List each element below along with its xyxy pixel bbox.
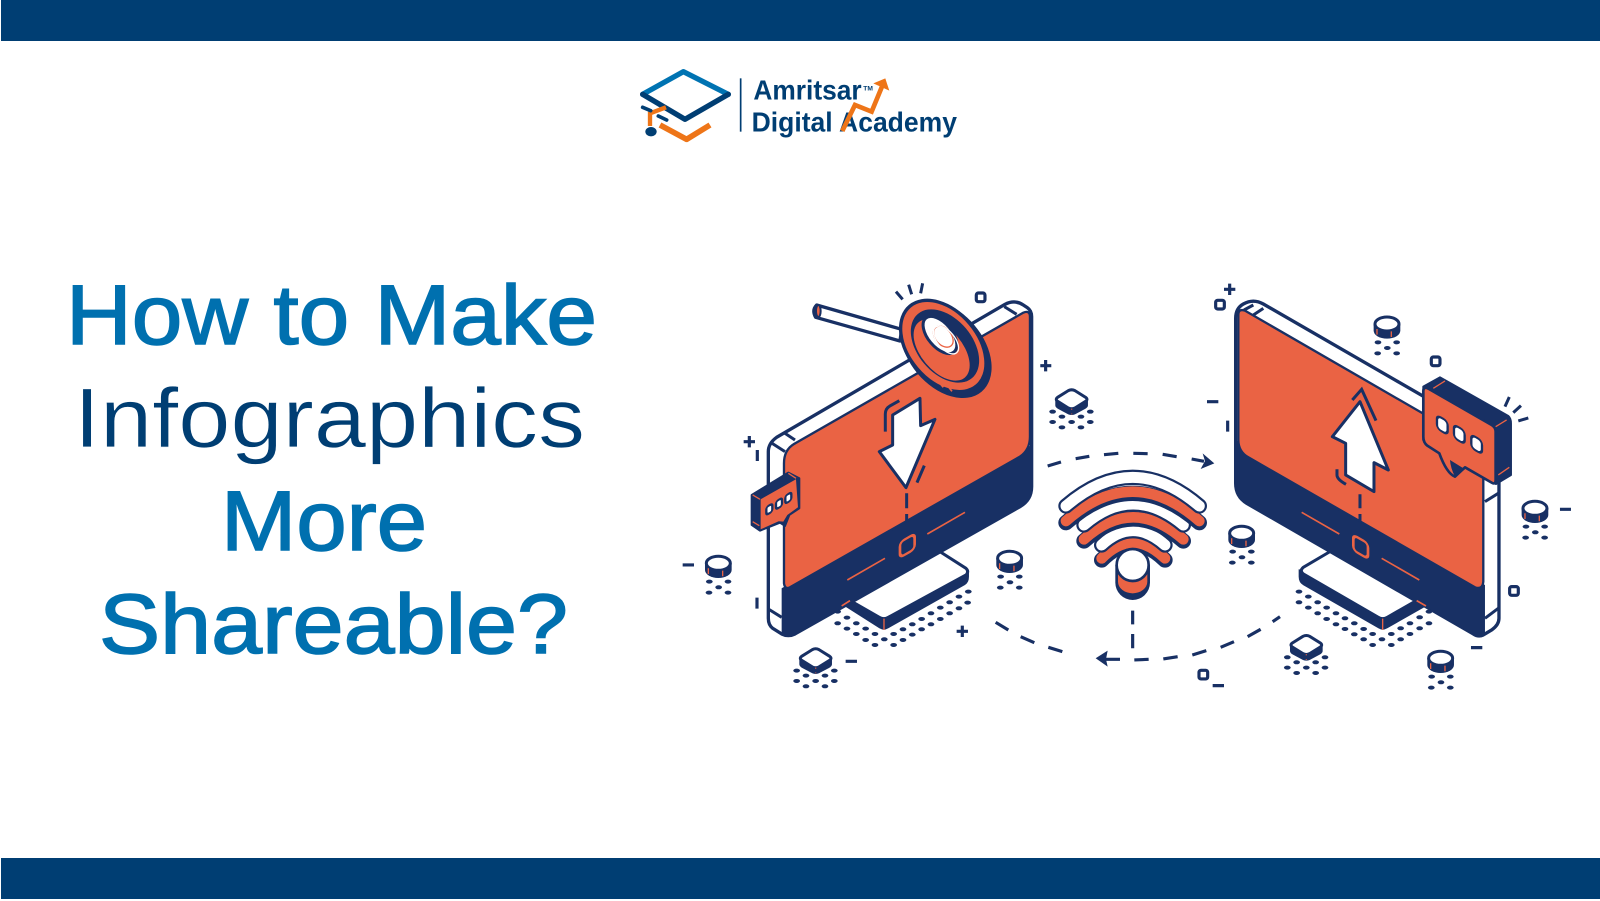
logo: Digital Academy (752, 106, 958, 137)
dashed arc arrow: bottom (996, 611, 1280, 667)
icon: chat bubble (1423, 377, 1528, 484)
bottom bar (1, 858, 1600, 898)
wifi symbol and dashed transfer arrows (996, 453, 1280, 667)
logo: TM (863, 85, 873, 92)
icon: download arrow (879, 398, 935, 488)
logo: Amritsar (753, 74, 862, 105)
title: Shareable? (99, 577, 568, 671)
right monitor with upload arrow (1199, 284, 1571, 690)
title: How to Make (66, 268, 597, 362)
icon: chat bubble (752, 473, 799, 531)
title: Infographics (74, 371, 585, 465)
small accents (1199, 284, 1571, 686)
small accents (683, 293, 1051, 661)
icon: magnifying glass (814, 283, 1010, 416)
title: More (221, 474, 427, 568)
icon: wifi (1066, 477, 1199, 600)
icon: upload arrow (1332, 389, 1388, 492)
top bar (1, 0, 1600, 40)
left monitor with download arrow (683, 283, 1094, 688)
dashed arc arrow: top (1048, 453, 1214, 469)
